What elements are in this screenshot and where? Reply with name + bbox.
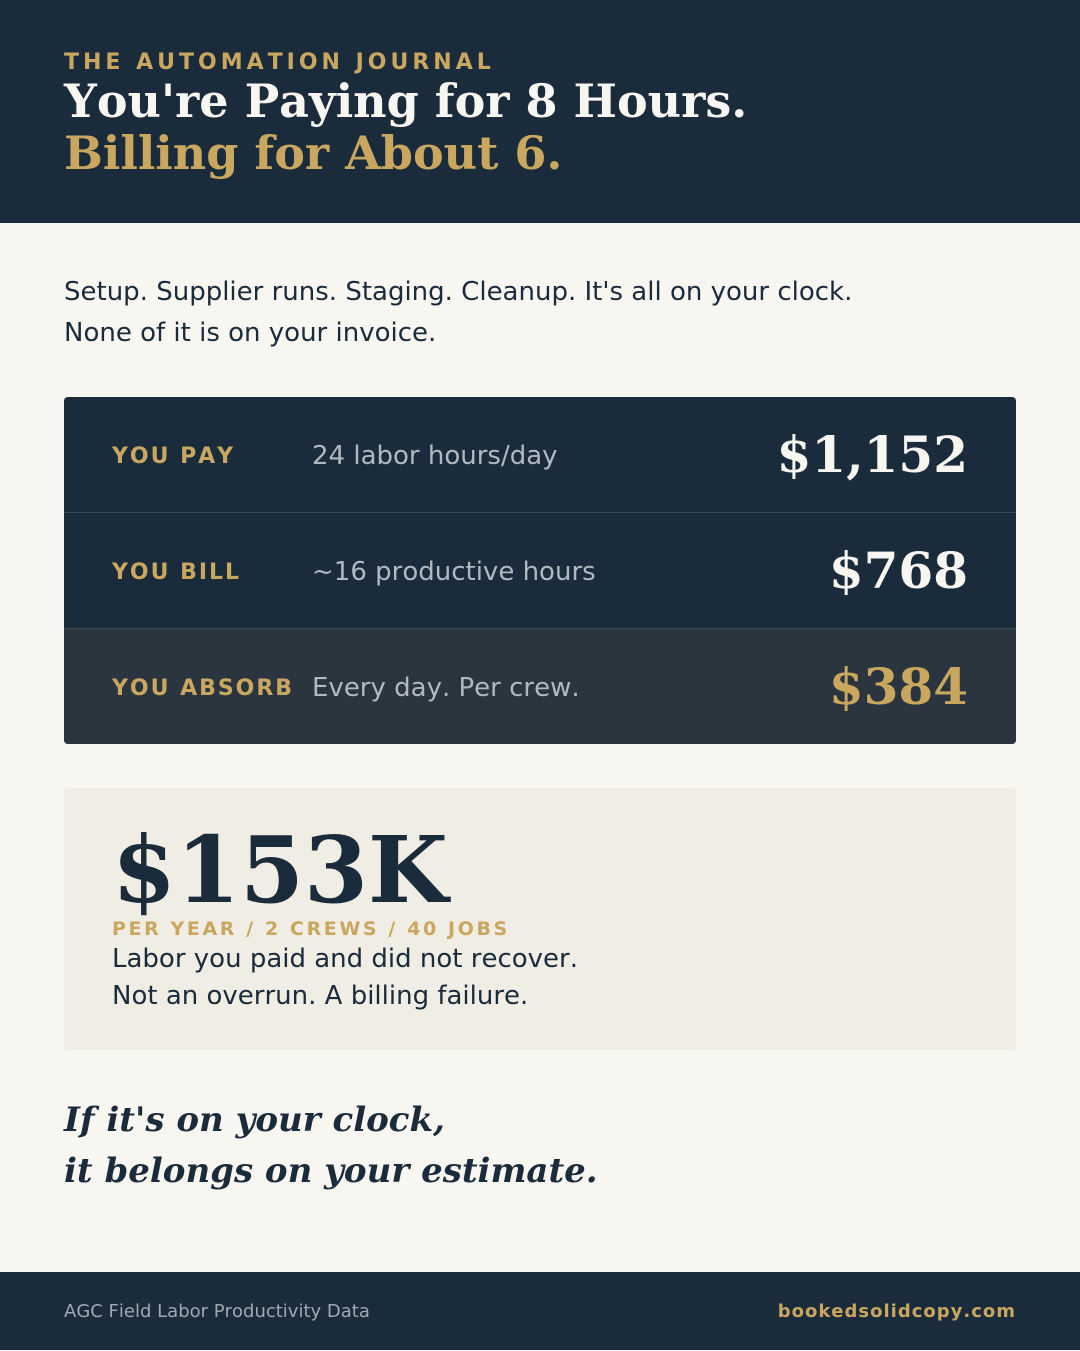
eyebrow: publication name: THE AUTOMATION JOURNAL: [64, 50, 495, 75]
row: you absorb: $384: [829, 657, 968, 716]
row: you pay: [64, 397, 1016, 513]
row: you absorb: YOU ABSORB: [112, 676, 294, 701]
header band: [0, 0, 1080, 223]
big number: $153K: [112, 816, 448, 924]
row: you absorb: [64, 629, 1016, 744]
title: Billing for About 6.: [64, 126, 562, 180]
panel: annual loss callout: [64, 788, 1016, 1050]
row: you absorb: Every day. Per crew.: [312, 673, 580, 703]
row: you bill: $768: [829, 541, 968, 600]
callout text: Not an overrun. A billing failure.: [112, 981, 528, 1011]
intro text: [64, 277, 852, 348]
intro text: Setup. Supplier runs. Staging. Cleanup. It's all on your clock.: [64, 277, 852, 307]
website: bookedsolidcopy.com: [778, 1301, 1016, 1322]
footer band: [0, 1272, 1080, 1350]
source: AGC Field Labor Productivity Data: [64, 1301, 370, 1322]
closing quote: If it's on your clock,: [64, 1100, 445, 1140]
row: you bill: ~16 productive hours: [312, 557, 596, 587]
title: You're Paying for 8 Hours.: [64, 74, 747, 128]
closing quote: it belongs on your estimate.: [64, 1151, 598, 1191]
intro text: None of it is on your invoice.: [64, 318, 436, 348]
row: you pay: 24 labor hours/day: [312, 441, 558, 471]
row: you bill: YOU BILL: [112, 560, 241, 585]
callout text: Labor you paid and did not recover.: [112, 944, 578, 974]
title: [64, 74, 747, 180]
callout text: [112, 944, 578, 1011]
closing quote: [63, 1100, 598, 1191]
panel: cost table: [64, 397, 1016, 744]
row: you pay: $1,152: [777, 425, 968, 484]
callout subhead: PER YEAR / 2 CREWS / 40 JOBS: [112, 918, 510, 940]
row: you bill: [64, 513, 1016, 629]
row: you pay: YOU PAY: [112, 444, 235, 469]
